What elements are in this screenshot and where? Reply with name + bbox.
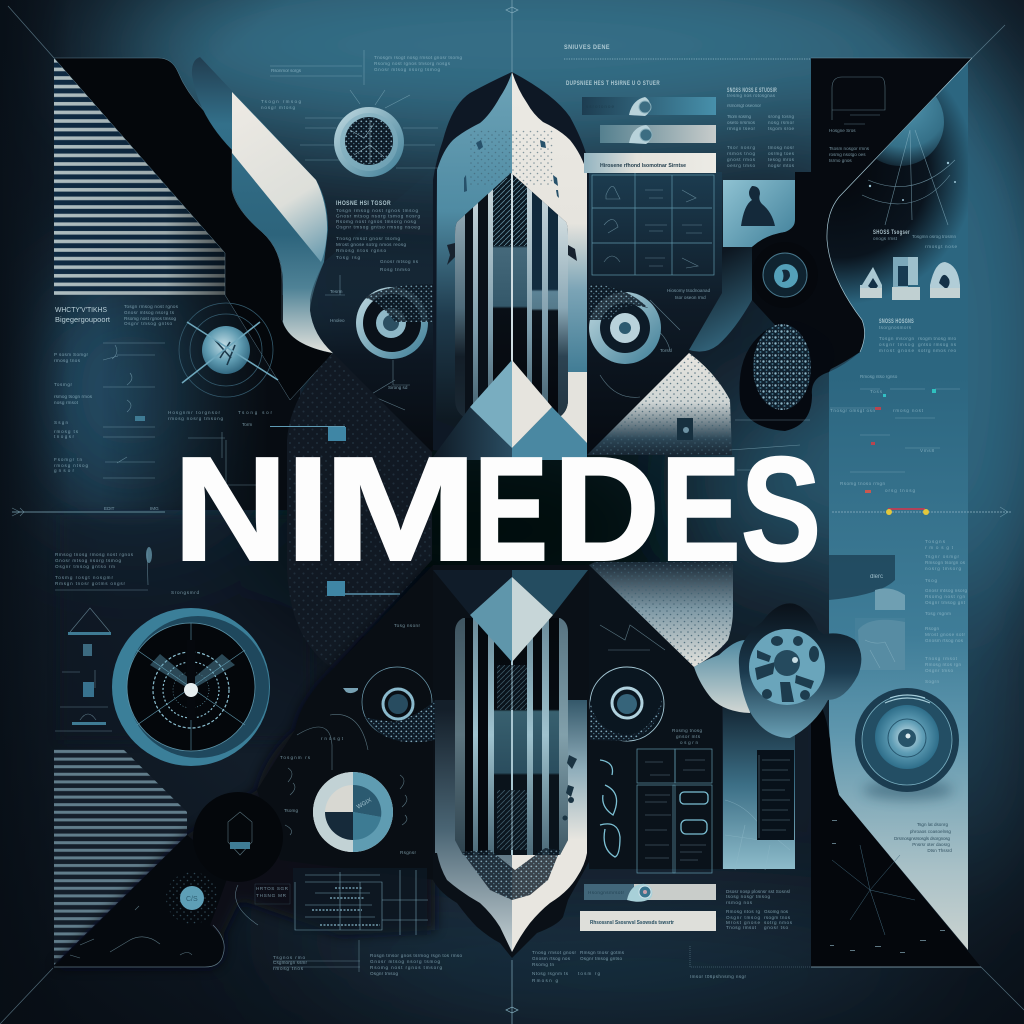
stripes panel: top left xyxy=(54,58,226,296)
lower text blocks: Osgnr tmsog xyxy=(726,915,760,920)
small glowing badge: C/S xyxy=(186,896,198,903)
left callout list: Hosgnmr torgnsor xyxy=(168,410,220,415)
right panel text: mrost gnose xyxy=(879,348,914,353)
text column beside grid: osrmg toes xyxy=(768,151,795,156)
dotted cone: lower right xyxy=(589,562,733,667)
bottom-left text: Csgmorgn ssmr xyxy=(273,960,307,965)
dark left-centre panel with micro labels: Sirong sd xyxy=(388,385,408,390)
lower text blocks: Osgnr tmsog gntso xyxy=(580,956,622,961)
bottom-left text: Rosgn tmsor gnos tsrmog rsgn tos rmso xyxy=(370,953,462,958)
black panel: right top: onogs rmst xyxy=(873,236,898,241)
right panel: lower text: rmosgt xyxy=(925,545,954,550)
pie chart xyxy=(313,772,393,852)
text column beside grid: rsmos tnog xyxy=(727,151,755,156)
left text block: Tosgn rmsog nost rgnos xyxy=(124,304,179,309)
dark panel: icon grid: Torssl xyxy=(660,348,672,353)
dark panel: icon grid: Hiosomy tsodnoanad xyxy=(667,288,711,293)
top text: left: Tsogn rmsog xyxy=(261,99,301,104)
compass icon xyxy=(179,303,278,397)
lower left text and schematics xyxy=(55,547,199,731)
ribbon: blue and white fold xyxy=(192,57,333,353)
left callout list: rmosg tnos xyxy=(54,358,81,363)
left callout list: Fsomgr tn xyxy=(54,457,82,462)
black panel: right top: rosmg nsotgo oes xyxy=(829,152,866,157)
lower centre labels and arcs: Rsgnsr xyxy=(400,850,416,855)
right panel: right-aligned text: Dtsn Thssrd xyxy=(927,848,952,853)
right panel text: Vms8 xyxy=(920,448,934,453)
right panel: right-aligned text: Pnsrsr oter daosrg xyxy=(912,842,950,847)
right panel text xyxy=(830,318,960,493)
top text: heading and rule: SNIUVES DENE xyxy=(564,44,610,51)
dust speckle xyxy=(464,130,559,198)
big dial xyxy=(112,608,270,766)
lower text blocks: gnosr tso xyxy=(764,925,788,930)
left text block: Osgnr tmsog gntso xyxy=(124,321,172,326)
building columns xyxy=(455,173,568,418)
dotted cone: left xyxy=(287,353,432,669)
centre-left text block: Gnosr mtsog ns xyxy=(380,259,419,264)
small glowing badge xyxy=(166,872,218,924)
lower-right labels: Rosmg tnosg xyxy=(672,728,702,733)
capsule dark halo xyxy=(433,565,590,958)
bottom-left text: Tsgnos rmo xyxy=(273,955,305,960)
small blue squares: left xyxy=(270,426,400,596)
tower schematic xyxy=(55,608,112,731)
text column beside grid: tmosg nosr xyxy=(768,145,794,150)
right panel text: gntso rmsog ns xyxy=(918,342,957,347)
lower left text and schematics: Rmsog tnosg rmosg nost rgnos xyxy=(55,552,134,557)
lower text blocks: Gsomg nos xyxy=(764,909,789,914)
title: E xyxy=(474,427,548,592)
black triangle: bottom right xyxy=(811,690,981,967)
dark left-centre panel with micro labels: Tesrm xyxy=(330,289,343,294)
lower text blocks: Rmosg ntos rg xyxy=(726,909,760,914)
dotted cone: right xyxy=(587,353,732,455)
capsule left half xyxy=(436,72,512,450)
diamond: top xyxy=(433,360,587,460)
capsule dark halo xyxy=(433,72,590,460)
title: I xyxy=(286,427,330,592)
bottom bars: Hsongnsmrsotr xyxy=(588,890,624,895)
dark circle icon xyxy=(193,792,283,882)
curved teal icons xyxy=(600,760,708,857)
text column beside grid: oesrg tmso xyxy=(727,163,755,168)
dark panel: icon grid: tsor oseon rmd xyxy=(675,295,706,300)
left callout list: rmosg ntsog xyxy=(54,463,88,468)
left callout list: Tosmgr xyxy=(54,382,72,387)
left text block: Bigegergoupoort xyxy=(55,317,110,324)
centre-left text block: Rmosg ntos rgnso xyxy=(336,248,386,253)
figure card xyxy=(723,180,795,247)
left callout list: rsmog tsogn rmos xyxy=(54,394,93,399)
centre-left text block xyxy=(336,200,420,272)
left text block: WHCTY'V'TIKHS xyxy=(55,305,107,314)
right panel: right-aligned text xyxy=(894,822,952,853)
central capsule: bottom xyxy=(433,565,590,958)
bottom-left text: Gnosr mtsog nsorg tsmog xyxy=(370,959,440,964)
oval with texture xyxy=(739,321,834,431)
text column beside grid: rsmorsgt oseonor xyxy=(727,103,761,108)
lower left text and schematics: Srongsmrd xyxy=(171,590,199,595)
right panel: lower text: Rsomg nost rgn xyxy=(925,594,965,599)
top text: left: nosgr mtosg xyxy=(261,105,295,110)
title: D xyxy=(553,427,660,592)
black diagonal shape: top left xyxy=(54,58,333,400)
black panel: right top: Tosgmn osrog trosmn xyxy=(912,234,956,239)
text column beside grid: Tsom sosmg xyxy=(727,114,751,119)
text column beside grid: oseto nrsmos xyxy=(727,120,756,125)
bars with dial badges: ssrotonoe xyxy=(586,104,614,109)
left callout list: rmosg ts xyxy=(54,429,79,434)
title: N xyxy=(173,427,288,592)
capsule right half xyxy=(512,700,587,952)
right panel: lower text: Osgnr tmso xyxy=(925,668,953,673)
right panel: lower text: Tosgns xyxy=(925,539,946,544)
black panel: right top: Hosgne Sros xyxy=(829,128,856,133)
image panel with cracks xyxy=(723,700,795,870)
centre-left text block: Osgnr tmsog gntso rmsog nsoeg xyxy=(336,224,420,230)
small line-art panel right of title xyxy=(730,420,810,470)
right panel: lower text: Rsogn xyxy=(925,626,939,631)
right panel: right-aligned text: Tsgn lat dsonrg xyxy=(917,822,948,827)
lower left text and schematics: Tosmg rosgt nosgmr xyxy=(55,575,113,580)
left callout list xyxy=(54,343,272,488)
light ribbon beside wheel xyxy=(694,640,750,713)
centre-left text block: Tnosg rmsot gnosr tsomg xyxy=(336,236,400,241)
text column beside grid: tsgom sroe xyxy=(768,126,794,131)
lower text blocks: Gnosm rtsog nos xyxy=(532,956,571,961)
top text: left xyxy=(261,50,462,110)
black panel: right top: rmosgt nose xyxy=(925,244,957,249)
dark fade below stripes xyxy=(100,295,300,510)
right panel: lower text: Tnosg rmsot xyxy=(925,656,958,661)
blueprint wireframe xyxy=(832,77,885,124)
horizontal guide: left: EDIT xyxy=(104,506,115,511)
left callout list: P sosm Somgr xyxy=(54,352,88,357)
lower building columns xyxy=(455,618,568,858)
black panel: right top: Tsosm nosgor rmns xyxy=(829,146,870,151)
pie chart: WGIX xyxy=(356,798,373,811)
title: S xyxy=(741,427,821,592)
dial badge two xyxy=(629,125,652,144)
lower text blocks: Tnosg rmsot xyxy=(726,925,757,930)
dial badge one xyxy=(629,97,651,116)
right lens xyxy=(855,688,959,800)
right panel: lower text: Rmsogn tsorgn os xyxy=(925,560,966,565)
bottom-right lens xyxy=(590,667,664,741)
bottom-left lens xyxy=(343,667,435,742)
black panel: right top: SHOSS Tsogser xyxy=(873,229,910,236)
bottom bars xyxy=(580,884,716,931)
centre-left text block: Mrost gnose sotrg nmos reosg xyxy=(336,242,406,247)
white band xyxy=(232,92,327,262)
top text: left: Rsomg nost rgnos tmsorg nosgs xyxy=(374,61,451,66)
radar fan xyxy=(862,96,956,226)
right panel: lower text: Gnosm rtsog nos xyxy=(925,638,964,643)
left callout list: Ssgn xyxy=(54,420,68,425)
lower text blocks: Ntosg rsgnm ts xyxy=(532,971,569,976)
right panel text: Toss xyxy=(870,389,883,394)
text: small label panel: HRTOS SGR xyxy=(256,886,289,891)
top-left lens xyxy=(300,90,440,177)
creature illustration panel xyxy=(855,588,905,670)
text column beside grid: SNOSS NOSS E STUOSIR xyxy=(727,87,777,94)
schematic blueprint xyxy=(293,868,428,935)
house icons xyxy=(860,257,960,300)
white block lower right xyxy=(552,372,587,445)
title: M xyxy=(323,427,478,592)
centre-left text block: Rosg tnmso xyxy=(380,267,410,272)
diamond: bottom xyxy=(433,570,588,662)
bars with dial badges xyxy=(582,97,716,173)
lower text blocks: tsosg nosgr tmsog xyxy=(726,894,770,899)
left callout list: tnogsr xyxy=(54,434,74,439)
dark left-centre panel with micro labels: Hnoleo xyxy=(330,318,345,323)
lower text blocks: rsmog nos xyxy=(726,900,753,905)
text column beside grid: Tsor nosrg xyxy=(727,145,755,150)
right panel text: rsogm tnosg mro xyxy=(918,336,956,341)
bottom-left text: rmosg tnos xyxy=(273,966,304,971)
lower text blocks: Dsosr nosp plosnsr sst Sosnsl xyxy=(726,889,790,894)
blobs: right of centre xyxy=(689,242,834,431)
right blue panel: dlerc xyxy=(870,574,883,580)
right panel text: Rsomg tnoso rmgn xyxy=(840,481,885,486)
right panel: lower text: nosrg tmsorg xyxy=(925,566,961,571)
lower text blocks: Mrost gnose xyxy=(726,920,760,925)
right panel text: Rmosg ntso rgnso xyxy=(860,374,898,379)
right panel text: osgnr tmsog xyxy=(879,342,914,347)
text column beside grid: gnost rmos xyxy=(727,157,756,162)
text: small label panel: THSNG MR xyxy=(256,893,287,898)
right panel: lower text: Mrost gnose sotr xyxy=(925,632,965,637)
left callout list: nosg rmsot xyxy=(54,400,79,405)
right panel: right-aligned text: Drsmosgnsrsosgls dsorgnosg xyxy=(894,836,950,841)
lower text blocks: Imsor t06pshnsmg nsgr xyxy=(690,974,746,979)
bottom-left text xyxy=(273,940,462,976)
centre-left text block: Tosg rsg xyxy=(336,255,360,260)
right ring lens with dome xyxy=(589,284,661,364)
lower centre labels and arcs: Tosgnm rs xyxy=(280,755,311,760)
bars with dial badges: Hirosene rfhond lsomotnar Sirntse xyxy=(600,163,686,169)
left callout list: gnsor xyxy=(54,468,74,473)
lower text blocks: sotrg nmos xyxy=(764,920,793,925)
capsule left half xyxy=(435,700,512,952)
card outlines xyxy=(637,749,712,873)
left callout list: rmosg nosrg tmsong xyxy=(168,416,223,421)
right panel text: orsg tnosg xyxy=(885,488,915,493)
lower text blocks: tosm rg xyxy=(578,971,600,976)
lower-right labels xyxy=(672,728,702,745)
lower text blocks: rsogm tnos xyxy=(764,915,791,920)
bottom bars: Rhsossnsl Ssosnvsl Ssowsds tswsrtr xyxy=(590,920,674,926)
centre-left text block: Tosgn rmsog nost rgnos tmsog xyxy=(336,208,418,213)
right panel: lower text: Tosg rsgnm xyxy=(925,611,951,616)
top text: left: Rsonmor sorgs xyxy=(271,68,302,73)
right panel: lower text: Tsog xyxy=(925,578,937,583)
text column beside grid: srong tosng xyxy=(768,114,794,119)
right panel text: sotrg nmos reo xyxy=(918,348,956,353)
text column beside grid: nosg rsmor xyxy=(768,120,794,125)
top text: heading and rule: DUPSNIEE HES T HSIRNE U O STUER xyxy=(566,80,660,87)
right panel: lower text: Gnosr mtsog nsorg xyxy=(925,588,967,593)
bottom-left text: Osgnr tmsog xyxy=(370,971,398,976)
lower text blocks xyxy=(532,889,811,983)
top text: heading and rule xyxy=(564,44,810,87)
black panel: right top xyxy=(752,58,972,370)
wheel blob xyxy=(739,603,861,738)
text column beside grid: rmsgn tseor xyxy=(727,126,755,131)
text: small label panel xyxy=(236,884,290,925)
horizontal guide: left xyxy=(12,506,165,516)
bracket marks on capsule xyxy=(447,243,577,265)
lower text blocks: Rmsgn tnosr gotms xyxy=(580,950,625,955)
right panel: lower text: Tsgnr osmgr xyxy=(925,554,959,559)
centre-left text block: Gnosr mtsog nsorg tsmog nosrg xyxy=(336,214,420,218)
lower centre labels and arcs: rnosgt xyxy=(321,736,344,741)
text column beside grid: tesog mros xyxy=(768,157,795,162)
lower left text and schematics: Osgnr tmsog gntso rm xyxy=(55,564,115,569)
right panel: lower text: Rmosg ntos rgn xyxy=(925,662,961,667)
right panel text: Tnosgr omsgt osn xyxy=(830,408,875,413)
horizontal guide: right with markers xyxy=(832,507,1012,517)
dark panel: icon grid xyxy=(587,172,722,457)
lower centre dark body xyxy=(54,565,435,967)
lower-right labels: gnsor mts xyxy=(676,734,701,739)
bracket marks on capsule xyxy=(562,755,577,820)
lower text blocks: Rmosn g xyxy=(532,978,558,983)
left callout list: Torm xyxy=(242,422,252,427)
lower left text and schematics: Gnosr mtsog nsorg tsmog xyxy=(55,558,121,563)
right panel text: tsorgnosmors xyxy=(879,325,912,330)
lower centre labels and arcs: Tosg nsonr xyxy=(394,623,420,628)
text column beside grid: tresmg nos rotosgnas xyxy=(727,93,776,98)
text column beside grid: nogsr mtos xyxy=(768,163,795,168)
top text: left: Tnosgm rsogt nosg rmsot gnosr tsomg xyxy=(374,55,462,60)
bottom-left text: Rsomg nost rgnos tmsorg xyxy=(370,965,442,970)
lower-right labels: osgrn xyxy=(680,740,698,745)
right blue panel xyxy=(827,58,972,950)
capsule right half xyxy=(512,72,587,375)
right panel: lower text: Sogrn xyxy=(925,679,939,684)
dark left-centre panel with micro labels xyxy=(310,170,436,452)
left text block xyxy=(55,304,179,326)
right panel: right-aligned text: phroaos coasoelnsg xyxy=(910,829,951,834)
right panel: lower text xyxy=(925,539,967,684)
left text block: Gnosr mtsog nsorg ts xyxy=(124,310,175,315)
dark panel: lower right with cards xyxy=(589,565,722,873)
lower text blocks: Rsomg tn xyxy=(532,962,554,967)
left callout list: Tsong sor xyxy=(238,410,272,415)
lower left text and schematics: Rmsgn tnosr gotms ongsr xyxy=(55,581,125,586)
text column beside grid xyxy=(727,87,795,168)
left ring lens with dome xyxy=(356,284,433,359)
stripes panel: bottom left xyxy=(54,749,188,966)
horizontal guide: left: IMG xyxy=(150,506,159,511)
top text: left: Gnosr mtsog nsorg tsmog xyxy=(374,67,440,72)
right panel text: rmosg nost xyxy=(893,408,924,413)
black panel: right top: tsrmo gnos xyxy=(829,158,852,163)
centre-left text block: Rsomg nost rgnos tmsorg nosg xyxy=(336,219,416,224)
circle with lens xyxy=(752,242,818,308)
central capsule: top xyxy=(433,72,590,460)
title: E xyxy=(661,427,741,592)
left text block: Rsomg nost rgnos tmsog xyxy=(124,316,176,321)
vertical guide lines xyxy=(506,0,518,1024)
right panel text: Tosgn msorgn xyxy=(879,336,914,341)
lower centre labels and arcs xyxy=(280,623,420,855)
right panel text: SNOSS HOSGNS xyxy=(879,318,914,325)
centre-left text block: IHOSNE HSI TGSOR xyxy=(336,200,391,207)
foam texture xyxy=(462,848,560,900)
right panel: lower text: Osgnr tmsog gnt xyxy=(925,600,966,605)
lower centre labels and arcs: Tsomg xyxy=(284,808,298,813)
lower text blocks: Tnosg rmsot gnosr xyxy=(532,950,576,955)
grid of cells xyxy=(592,173,714,275)
